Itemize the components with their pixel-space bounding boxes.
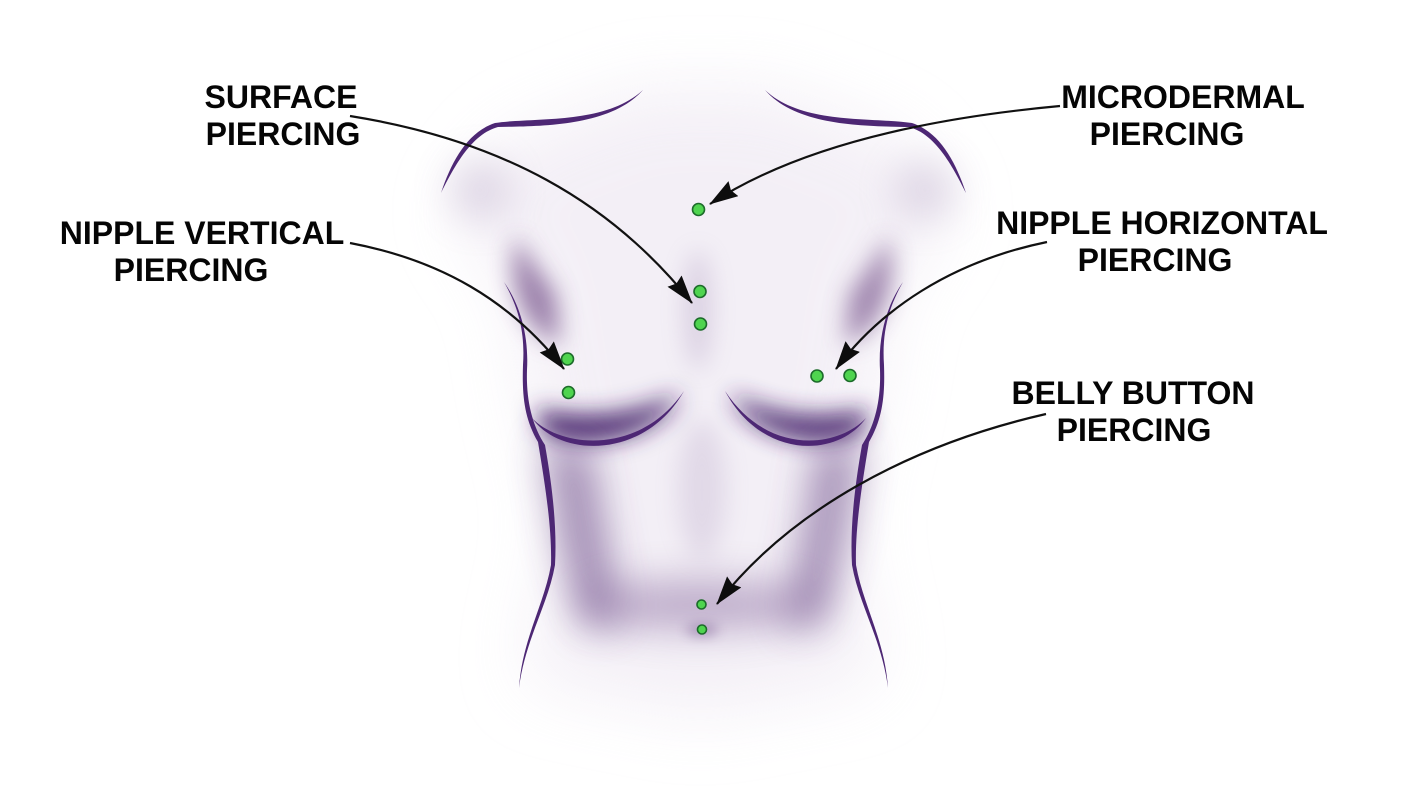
arrow: microdermal piercing [710,106,1060,204]
label: nipple horizontal piercing: PIERCING [1078,242,1232,278]
torso illustration [441,90,966,715]
body outline strokes [441,90,966,688]
arrow: nipple horizontal piercing [836,242,1047,369]
label: nipple vertical piercing: PIERCING [114,252,268,288]
label: nipple horizontal piercing: NIPPLE HORIZONTAL [996,205,1328,241]
label: microdermal piercing: MICRODERMAL [1061,79,1305,115]
label: surface piercing: SURFACE [205,79,357,115]
soft body shading [450,90,955,715]
piercing markers [562,204,856,634]
arrow: surface piercing [350,116,692,303]
arrow: nipple vertical piercing [350,243,564,369]
arrow: belly button piercing [717,414,1046,604]
label: nipple vertical piercing: NIPPLE VERTICAL [60,215,344,251]
label: surface piercing: PIERCING [206,116,360,152]
label: belly button piercing: PIERCING [1057,412,1211,448]
label: microdermal piercing: PIERCING [1090,116,1244,152]
label: belly button piercing: BELLY BUTTON [1012,375,1254,411]
